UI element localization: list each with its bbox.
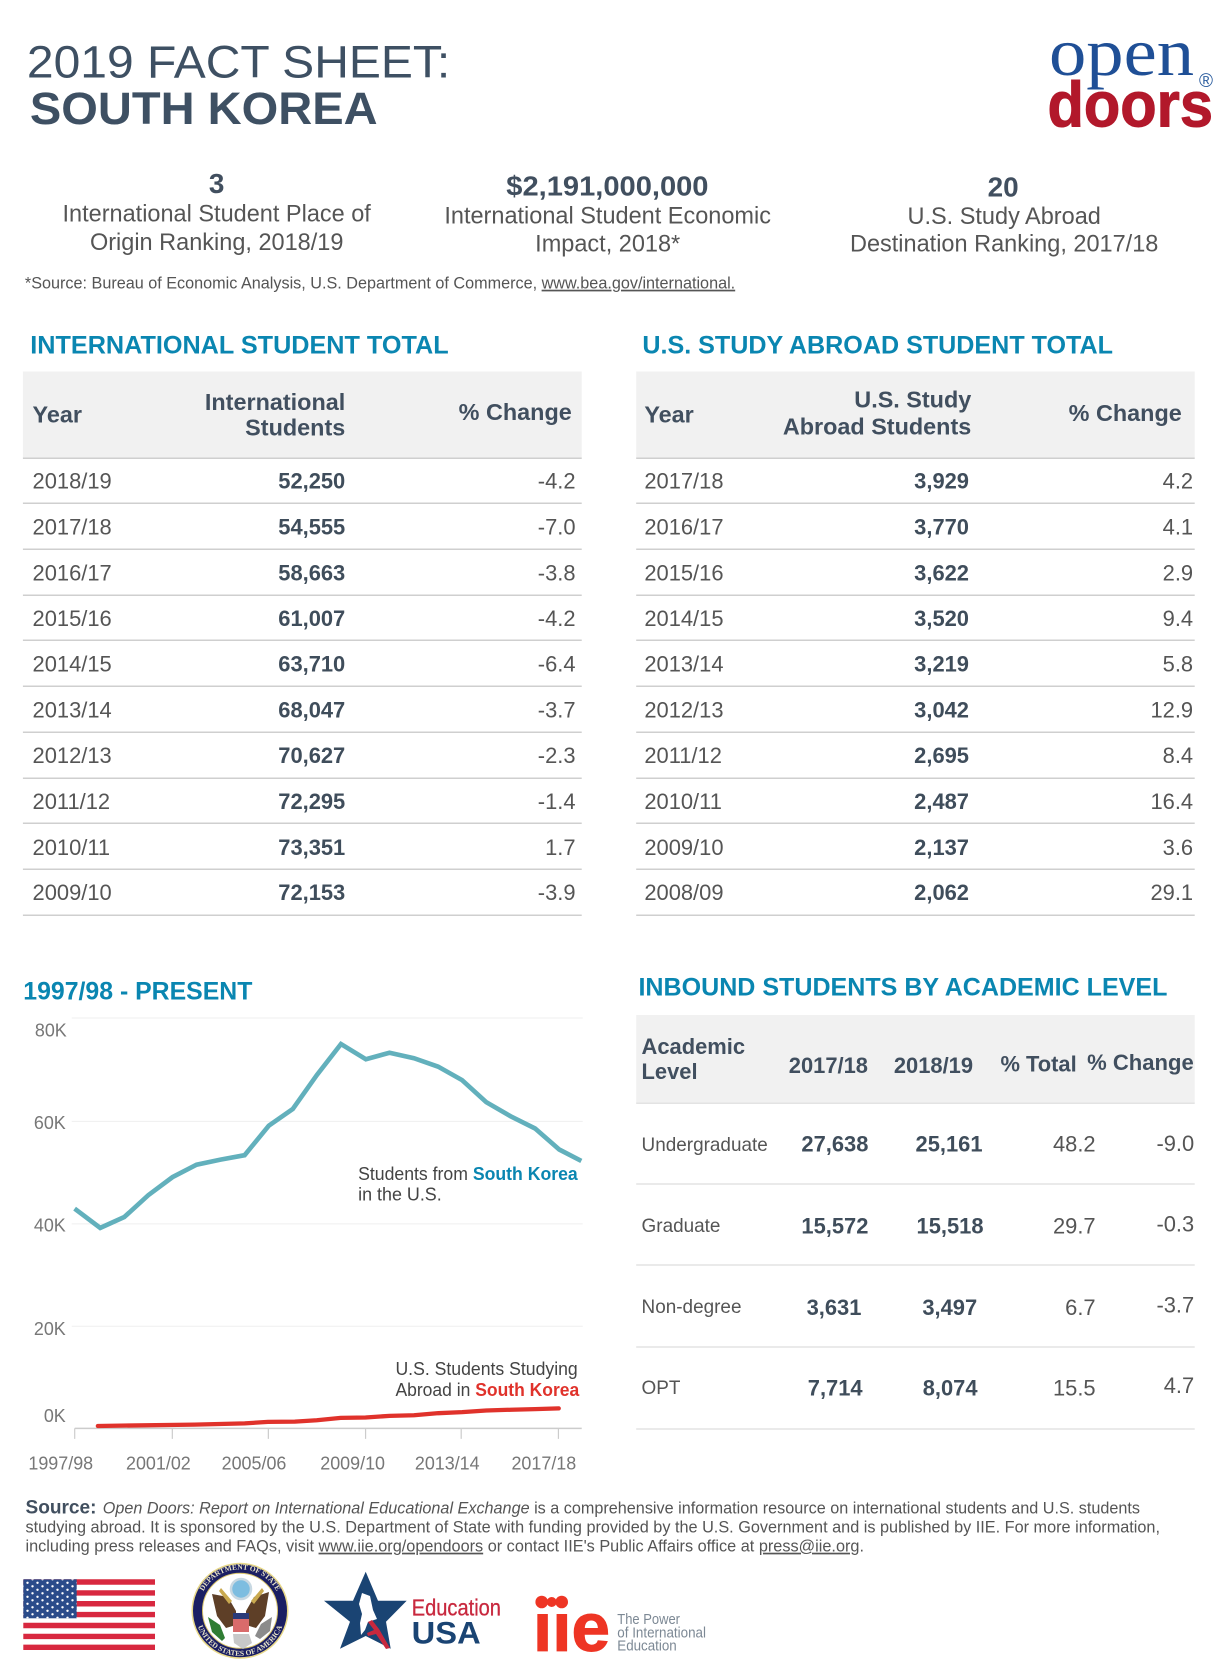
- row opt: [636, 1373, 1195, 1429]
- row 2012/13: 2012/13: [33, 743, 112, 768]
- row 2017/18: 2017/18: [33, 514, 112, 539]
- row 2016/17: -3.8: [538, 560, 576, 585]
- row 2009/10: 2,137: [914, 835, 969, 860]
- logo: open doors: ®: [1199, 71, 1213, 92]
- row 2018/19: -4.2: [538, 468, 576, 493]
- row 2015/16: 61,007: [278, 606, 345, 631]
- table header: Year: [33, 402, 82, 428]
- row non-degree: 3,631: [807, 1295, 861, 1320]
- row 2013/14: 5.8: [1163, 652, 1193, 677]
- row 2015/16: 2015/16: [33, 606, 112, 631]
- row 2017/18: [23, 514, 582, 549]
- table header: 2017/18: [789, 1053, 868, 1078]
- icon: department of state seal: DEPARTMENT OF STATE: [199, 1564, 280, 1592]
- row 2012/13: 3,042: [914, 698, 969, 723]
- row 2011/12: [636, 743, 1195, 778]
- panel: inbound students by academic level: [636, 974, 1195, 1429]
- row 2008/09: 2008/09: [644, 880, 724, 905]
- icon: department of state seal: [192, 1562, 288, 1659]
- logo: educationusa: USA: [412, 1614, 481, 1650]
- row 2016/17: [23, 560, 582, 595]
- row 2013/14: [636, 652, 1195, 686]
- x axis: 2005/06: [222, 1453, 286, 1473]
- row 2010/11: [636, 789, 1195, 823]
- annotation: u.s. students studying abroad: Abroad in South Korea: [395, 1380, 580, 1400]
- row 2018/19: [23, 468, 582, 503]
- heading: 1997/98 - present: 1997/98 - PRESENT: [23, 977, 253, 1005]
- row 2011/12: 8.4: [1163, 743, 1193, 768]
- row 2010/11: 73,351: [278, 835, 345, 860]
- stat: place of origin ranking: International Student Place of: [62, 201, 371, 227]
- row 2012/13: [23, 743, 582, 778]
- row 2015/16: [636, 560, 1195, 595]
- row opt: 4.7: [1164, 1373, 1194, 1398]
- row 2014/15: [636, 606, 1195, 640]
- icon: star: [324, 1572, 407, 1649]
- logo: iie: iie: [533, 1589, 610, 1666]
- logo: iie: [530, 1589, 706, 1666]
- row 2016/17: 2016/17: [33, 560, 112, 585]
- title: [27, 36, 450, 134]
- row 2009/10: [23, 880, 582, 915]
- row 2017/18: 3,929: [914, 468, 969, 493]
- row undergraduate: 27,638: [801, 1132, 868, 1157]
- stat: economic impact: Impact, 2018*: [535, 231, 680, 257]
- row 2008/09: [636, 880, 1195, 915]
- row 2013/14: 3,219: [914, 652, 969, 677]
- row 2009/10: 3.6: [1163, 835, 1193, 860]
- row 2015/16: -4.2: [538, 606, 576, 631]
- stat: economic impact: $2,191,000,000: [506, 170, 708, 202]
- table header: Level: [642, 1059, 698, 1084]
- source paragraph: studying abroad. It is sponsored by the U.S. Department of State with funding provided by the U.S. Government and is published by IIE. For more information,: [26, 1518, 1160, 1537]
- row non-degree: -3.7: [1156, 1293, 1194, 1318]
- row 2018/19: 2018/19: [33, 468, 112, 493]
- table header: [636, 372, 1195, 458]
- y axis labels: 40K: [34, 1215, 66, 1235]
- row 2013/14: 2013/14: [33, 698, 112, 723]
- row undergraduate: 48.2: [1053, 1132, 1096, 1157]
- panel: u.s. study abroad student total: [636, 332, 1195, 915]
- row 2013/14: 2013/14: [644, 652, 724, 677]
- table header: Academic: [642, 1034, 745, 1059]
- row graduate: 15,572: [801, 1214, 868, 1239]
- row 2017/18: 2017/18: [644, 468, 724, 493]
- row 2008/09: 2,062: [914, 880, 969, 905]
- table header: [636, 1015, 1195, 1103]
- title: 2019 FACT SHEET:: [27, 36, 450, 87]
- row 2017/18: 4.2: [1163, 468, 1193, 493]
- source paragraph: [26, 1497, 1160, 1556]
- logo: educationusa: Education: [412, 1594, 501, 1620]
- row opt: OPT: [642, 1378, 681, 1399]
- logo: iie: The Power: [617, 1611, 680, 1628]
- row 2010/11: 2010/11: [644, 789, 722, 814]
- y axis labels: 0K: [44, 1406, 66, 1426]
- x axis: 2009/10: [320, 1453, 385, 1473]
- stat: study abroad destination ranking: [850, 172, 1158, 257]
- row 2009/10: [636, 835, 1195, 869]
- row graduate: Graduate: [642, 1216, 720, 1237]
- stat: economic impact: [444, 170, 771, 257]
- row 2011/12: [23, 789, 582, 823]
- x axis: [28, 1428, 582, 1473]
- row 2010/11: 16.4: [1150, 789, 1193, 814]
- y axis labels: 60K: [34, 1113, 66, 1133]
- x axis: 2001/02: [126, 1453, 191, 1473]
- row 2014/15: 3,520: [914, 606, 969, 631]
- row 2009/10: 2009/10: [33, 880, 112, 905]
- stat: study abroad destination ranking: U.S. Study Abroad: [907, 203, 1101, 229]
- stat: study abroad destination ranking: Destination Ranking, 2017/18: [850, 231, 1158, 257]
- table header: International: [205, 389, 345, 415]
- annotation: students from south korea: Students from South Korea: [358, 1164, 579, 1184]
- row 2011/12: 2011/12: [644, 743, 722, 768]
- row undergraduate: 25,161: [916, 1132, 983, 1157]
- row 2008/09: 29.1: [1150, 880, 1193, 905]
- row 2014/15: -6.4: [538, 652, 576, 677]
- row undergraduate: [636, 1131, 1195, 1184]
- table header: % Change: [1087, 1050, 1194, 1075]
- row 2017/18: 54,555: [278, 514, 345, 539]
- annotation: students from south korea: in the U.S.: [358, 1184, 442, 1205]
- logo: iie: of International: [617, 1625, 706, 1642]
- row 2012/13: 2012/13: [644, 698, 724, 723]
- annotation: u.s. students studying abroad: [395, 1359, 580, 1400]
- row opt: 8,074: [923, 1376, 978, 1401]
- line: u.s. students studying abroad in south korea: [98, 1408, 559, 1426]
- table header: Year: [644, 402, 694, 428]
- annotation: u.s. students studying abroad: U.S. Students Studying: [395, 1359, 578, 1379]
- x axis: 2013/14: [415, 1453, 480, 1473]
- row opt: 15.5: [1053, 1376, 1096, 1401]
- row graduate: 29.7: [1053, 1214, 1096, 1239]
- row 2011/12: -1.4: [538, 789, 576, 814]
- source paragraph: Open Doors: Report on International Educational Exchange is a comprehensive information resource on international students and U.S. students: [103, 1498, 1140, 1517]
- source paragraph: including press releases and FAQs, visit www.iie.org/opendoors or contact IIE's Public Affairs office at press@iie.org.: [26, 1537, 864, 1556]
- row non-degree: [636, 1293, 1195, 1347]
- row 2012/13: 70,627: [278, 743, 345, 768]
- row 2014/15: 2014/15: [644, 606, 724, 631]
- stat: place of origin ranking: 3: [209, 168, 224, 199]
- row graduate: -0.3: [1156, 1212, 1194, 1237]
- row non-degree: 6.7: [1065, 1295, 1096, 1320]
- row 2012/13: -2.3: [538, 743, 576, 768]
- row 2009/10: 72,153: [278, 880, 345, 905]
- row 2010/11: 2,487: [914, 789, 969, 814]
- heading: inbound students by academic level: INBOUND STUDENTS BY ACADEMIC LEVEL: [638, 974, 1167, 1002]
- stat: study abroad destination ranking: 20: [988, 172, 1019, 203]
- row 2015/16: 2.9: [1163, 560, 1193, 585]
- row 2011/12: 72,295: [278, 789, 345, 814]
- row 2013/14: 68,047: [278, 698, 345, 723]
- row 2014/15: 2014/15: [33, 652, 112, 677]
- row 2010/11: 1.7: [545, 835, 576, 860]
- row 2016/17: 4.1: [1163, 514, 1193, 539]
- row undergraduate: -9.0: [1156, 1131, 1194, 1156]
- row 2012/13: 12.9: [1150, 698, 1193, 723]
- icon: u.s. flag: [23, 1579, 155, 1650]
- logo: iie: Education: [617, 1638, 677, 1654]
- table header: [23, 372, 582, 458]
- row 2015/16: 2015/16: [644, 560, 724, 585]
- row 2014/15: [23, 652, 582, 686]
- row 2013/14: -3.7: [538, 698, 576, 723]
- x axis: 2017/18: [511, 1453, 576, 1473]
- panel: trend chart 1997/98 to present: [23, 977, 583, 1473]
- annotation: students from south korea: [358, 1164, 579, 1205]
- row 2012/13: [636, 698, 1195, 732]
- row non-degree: 3,497: [922, 1295, 977, 1320]
- source note: *Source: Bureau of Economic Analysis, U.S. Department of Commerce, www.bea.gov/international.: [25, 274, 735, 293]
- table header: % Change: [1069, 400, 1182, 426]
- y axis labels: 80K: [35, 1021, 67, 1041]
- row 2014/15: 9.4: [1163, 606, 1193, 631]
- panel: international student total: [23, 332, 582, 915]
- row 2013/14: [23, 698, 582, 732]
- row 2014/15: 63,710: [278, 652, 345, 677]
- row graduate: [636, 1212, 1195, 1265]
- row 2011/12: 2011/12: [33, 789, 110, 814]
- stat: place of origin ranking: Origin Ranking, 2018/19: [90, 229, 343, 255]
- row 2017/18: [636, 468, 1195, 503]
- row opt: 7,714: [808, 1376, 863, 1401]
- heading: international student total: INTERNATIONAL STUDENT TOTAL: [30, 332, 449, 360]
- source paragraph: Source:: [26, 1497, 96, 1518]
- stat: economic impact: International Student Economic: [444, 202, 771, 228]
- table header: % Total: [1000, 1052, 1077, 1077]
- heading: u.s. study abroad student total: U.S. STUDY ABROAD STUDENT TOTAL: [642, 332, 1113, 360]
- row 2016/17: [636, 514, 1195, 549]
- row 2016/17: 58,663: [278, 560, 345, 585]
- row 2009/10: -3.9: [538, 880, 576, 905]
- x axis: 1997/98: [28, 1453, 93, 1473]
- logo: educationusa: [324, 1572, 501, 1650]
- line: students from south korea in the u.s.: [75, 1044, 581, 1228]
- y axis labels: 20K: [34, 1319, 66, 1339]
- row 2015/16: 3,622: [914, 560, 969, 585]
- table header: 2018/19: [894, 1053, 973, 1078]
- title: SOUTH KOREA: [30, 83, 378, 134]
- row 2017/18: -7.0: [538, 514, 576, 539]
- y axis labels: [34, 1021, 67, 1426]
- row 2009/10: 2009/10: [644, 835, 724, 860]
- row undergraduate: Undergraduate: [642, 1135, 768, 1156]
- row 2018/19: 52,250: [278, 468, 345, 493]
- icon: department of state seal: UNITED STATES OF AMERICA: [198, 1624, 282, 1656]
- row 2016/17: 3,770: [914, 514, 969, 539]
- row 2011/12: 2,695: [914, 743, 969, 768]
- table header: % Change: [459, 399, 572, 425]
- row 2015/16: [23, 606, 582, 640]
- logo: open doors: [1048, 14, 1213, 141]
- stat: place of origin ranking: [62, 168, 371, 255]
- row non-degree: Non-degree: [642, 1297, 741, 1318]
- table header: Abroad Students: [783, 414, 971, 440]
- row 2010/11: [23, 835, 582, 869]
- row 2010/11: 2010/11: [33, 835, 110, 860]
- table header: Students: [245, 415, 345, 441]
- row graduate: 15,518: [917, 1214, 984, 1239]
- row 2016/17: 2016/17: [644, 514, 724, 539]
- logo: open doors: open: [1049, 14, 1194, 90]
- table header: U.S. Study: [854, 387, 971, 413]
